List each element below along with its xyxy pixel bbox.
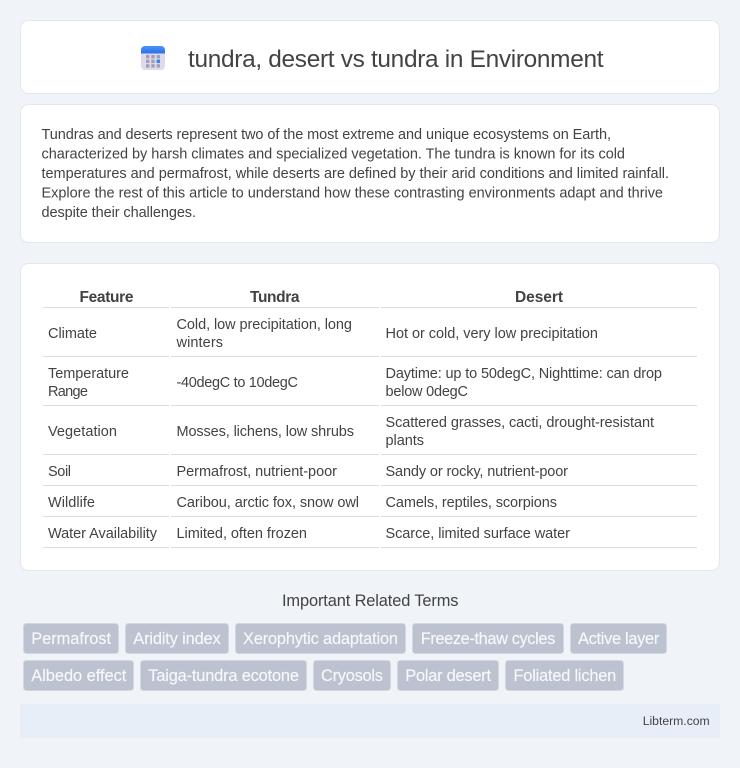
tag: Cryosols [314,660,390,690]
panel: introduction [20,104,720,242]
row: wildlife: Camels, reptiles, scorpions [386,495,557,511]
row: temperature range [48,366,662,400]
row: soil: Permafrost, nutrient-poor [176,464,337,480]
row: water availability [48,526,570,542]
row: water availability: Limited, often frozen [176,526,307,542]
tag: Polar desert [398,660,498,690]
row: soil: Soil [48,464,71,480]
row: temperature range: Daytime: up to 50degC, Nighttime: can drop [386,366,662,382]
tag: Active layer [570,624,666,654]
text block: intro paragraph: Tundras and deserts represent two of the most extreme and unique ecosystems on Earth, [42,127,611,143]
heading: related terms: Important Related Terms [282,592,458,610]
panel: title card [20,20,720,94]
table header: Tundra [250,289,300,306]
tag: Xerophytic adaptation: Xerophytic adaptation [243,630,398,648]
panel: comparison table [20,264,720,570]
footer [20,704,720,738]
table header [80,289,563,306]
tag: Albedo effect [24,660,134,690]
icon: calendar [141,46,165,70]
row: climate [48,317,598,351]
tag: Taiga-tundra ecotone [140,660,306,690]
text block: intro paragraph: Explore the rest of this article to understand how these contrasting environments adapt and thrive [42,186,663,202]
tag: Permafrost: Permafrost [31,630,111,648]
row: temperature range: below 0degC [386,384,468,400]
tag: Active layer: Active layer [578,630,660,648]
tag group: related terms [24,624,666,690]
tag: Foliated lichen [506,660,624,690]
table header: Desert [515,289,563,306]
row: vegetation: Vegetation [48,424,117,440]
row: temperature range: Range [48,384,88,400]
row: vegetation: Scattered grasses, cacti, drought-resistant [386,415,654,431]
row: climate: Cold, low precipitation, long [176,317,352,333]
row: soil: Sandy or rocky, nutrient-poor [386,464,568,480]
text block: intro paragraph [42,127,669,221]
tag: Cryosols: Cryosols [321,667,383,685]
tag: Polar desert: Polar desert [405,667,491,685]
row: vegetation: Mosses, lichens, low shrubs [176,424,354,440]
row: temperature range: -40degC to 10degC [176,375,298,391]
row: vegetation [48,415,654,449]
row: climate: winters [176,335,223,351]
tag: Permafrost [24,624,118,654]
tag: Taiga-tundra ecotone: Taiga-tundra ecotone [148,667,299,685]
row: water availability: Water Availability [48,526,158,542]
tag: Freeze-thaw cycles: Freeze-thaw cycles [421,630,555,648]
row: wildlife: Caribou, arctic fox, snow owl [176,495,359,511]
row: wildlife [48,495,557,511]
title: tundra, desert vs tundra in Environment [188,46,604,73]
tag: Xerophytic adaptation [236,624,406,654]
tag: Freeze-thaw cycles [412,624,564,654]
table header: Feature [80,289,134,306]
row: water availability: Scarce, limited surface water [386,526,570,542]
text block: intro paragraph: characterized by harsh climates and specialized vegetation. The tundra is known for its cold [42,146,625,162]
text block: intro paragraph: despite their challenges. [42,205,196,221]
row: climate: Hot or cold, very low precipitation [386,326,598,342]
tag: Albedo effect: Albedo effect [31,667,127,685]
tag: Foliated lichen: Foliated lichen [514,667,616,685]
text block: intro paragraph: temperatures and permafrost, while deserts are defined by their arid conditions and limited rainfall. [42,166,669,182]
tag: Aridity index [126,624,228,654]
row: climate: Climate [48,326,97,342]
row: soil [48,464,568,480]
row: vegetation: plants [386,433,424,449]
tag: Aridity index: Aridity index [133,630,221,648]
row: temperature range: Temperature [48,366,129,382]
footer credit: Libterm.com [643,714,710,728]
row: wildlife: Wildlife [48,495,95,511]
